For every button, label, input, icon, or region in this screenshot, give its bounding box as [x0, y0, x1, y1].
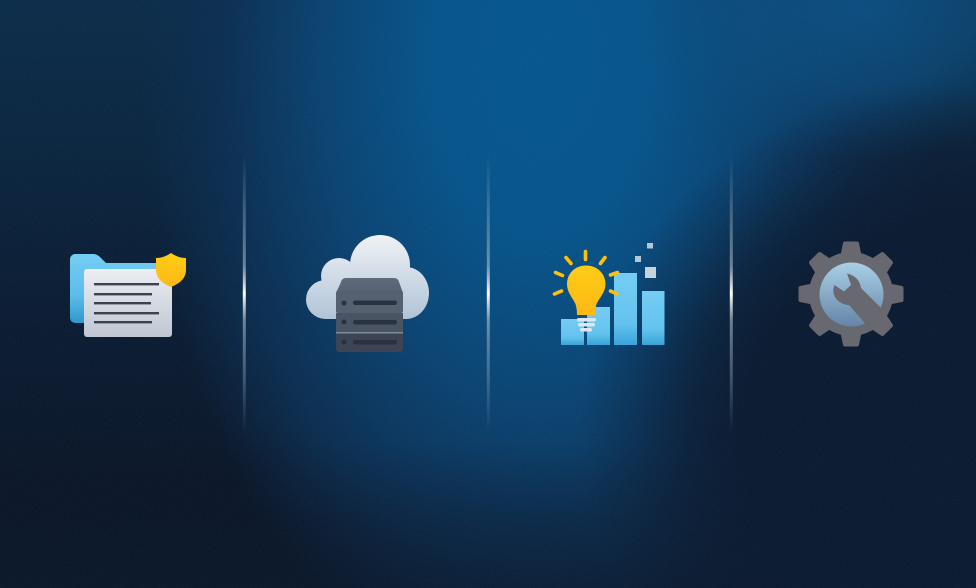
bulb screw base — [577, 318, 596, 332]
gear hub disc — [820, 262, 884, 326]
divider 2 — [487, 155, 490, 432]
divider 3 — [730, 155, 733, 432]
icon: gear and wrench — [798, 242, 904, 346]
bar chart — [561, 273, 664, 345]
bulb rays — [554, 252, 618, 294]
gear — [798, 242, 904, 346]
icon: idea and growth chart — [554, 243, 664, 345]
document sheet — [84, 269, 172, 337]
shield badge — [156, 253, 186, 287]
icon: secure folder — [70, 253, 186, 337]
icon: cloud server — [306, 235, 429, 352]
light bulb — [567, 266, 606, 315]
folder back — [70, 254, 160, 323]
floating squares — [635, 243, 656, 278]
wrench — [833, 274, 882, 328]
divider 1 — [243, 155, 246, 432]
cloud — [306, 235, 429, 319]
document text lines — [94, 283, 159, 323]
server stack — [336, 278, 403, 352]
